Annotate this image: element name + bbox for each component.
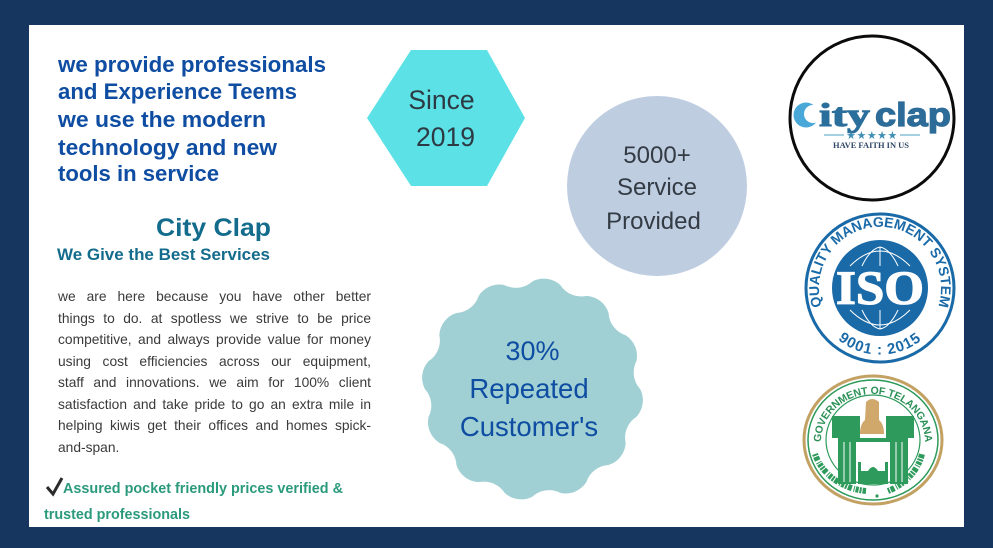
- heading: provide professionals: tools in service: [58, 161, 219, 186]
- icon: globe lines: [850, 247, 910, 329]
- badge: 5000+ service provided: Provided: [606, 208, 701, 235]
- icon: check mark: [47, 478, 62, 494]
- icon: crescent: [794, 102, 822, 128]
- badge: since 2019: 2019: [416, 122, 475, 152]
- logo: ISO certification: ISO: [836, 262, 924, 315]
- badge: 5000+ service provided: Service: [617, 174, 697, 201]
- logo: City Clap: ★★★★★: [846, 129, 898, 142]
- icon: emblem: [860, 399, 884, 434]
- badge: since 2019: [367, 50, 525, 186]
- logo: ISO certification: 9001 : 2015: [839, 332, 920, 354]
- body text: we are here because you have other better: [58, 289, 371, 304]
- heading: provide professionals: we provide professionals: [57, 52, 326, 77]
- badge: 5000+ service provided: 5000+: [623, 142, 691, 169]
- body text: using cost efficiencies across our equipment,: [58, 354, 371, 368]
- subheading: City Clap: City Clap: [156, 214, 271, 242]
- heading: provide professionals: we use the modern: [57, 107, 266, 132]
- body text: helping kiwis get their offices and homes spick-: [58, 418, 371, 433]
- logo: ISO certification: [804, 212, 956, 364]
- badge: 30% repeated customers: [422, 279, 643, 499]
- subheading: City Clap: [57, 214, 271, 264]
- badge: 5000+ service provided: [567, 96, 747, 276]
- body text: [58, 286, 372, 461]
- badge: 30% repeated customers: Customer's: [460, 411, 598, 442]
- callout: assured prices: Assured pocket friendly prices verified &: [63, 480, 343, 497]
- badge: since 2019: Since: [408, 85, 475, 115]
- logo: ISO certification: QUALITY MANAGEMENT SYSTEM: [809, 217, 951, 308]
- heading: provide professionals: [57, 52, 326, 186]
- callout: assured prices: trusted professionals: [44, 506, 190, 523]
- icon: charminar: [858, 462, 888, 484]
- callout: assured prices: [44, 478, 343, 523]
- bottom script band: [815, 454, 922, 491]
- icon: gate: [832, 416, 914, 484]
- badge: 30% repeated customers: 30%: [505, 336, 560, 366]
- subheading: City Clap: We Give the Best Services: [57, 245, 270, 264]
- logo: Government of Telangana seal: GOVERNMENT OF TELANGANA: [814, 386, 932, 442]
- heading: provide professionals: technology and new: [58, 135, 277, 160]
- body text: staff and innovations. we aim for 100% client: [58, 375, 371, 390]
- logo: Government of Telangana seal: [802, 374, 944, 506]
- badge: 30% repeated customers: Repeated: [469, 373, 589, 404]
- body text: competitive, and always provide value for money: [58, 332, 371, 347]
- logo: City Clap: clap: [875, 96, 951, 133]
- logo: City Clap: HAVE FAITH IN US: [833, 141, 910, 150]
- body text: satisfaction and take pride to go an extra mile in: [58, 396, 371, 412]
- body text: and-span.: [58, 440, 119, 454]
- heading: provide professionals: and Experience Teems: [58, 79, 297, 104]
- body text: things to do. at spotless we strive to be price: [58, 310, 371, 326]
- logo: City Clap: [790, 36, 954, 200]
- logo: City Clap: ity: [819, 98, 871, 134]
